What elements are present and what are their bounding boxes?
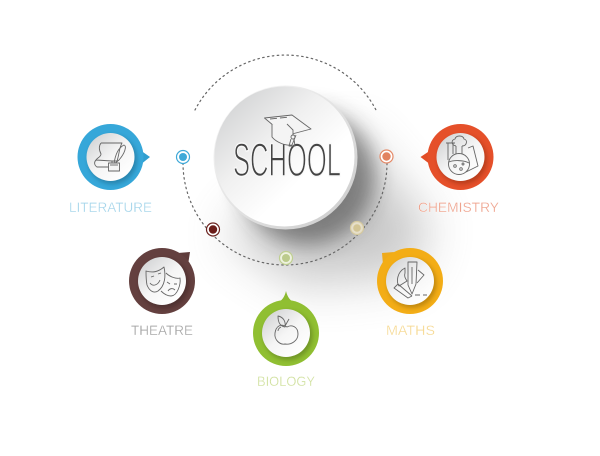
dotted arc: upper xyxy=(195,55,377,112)
panel: chemistry xyxy=(418,124,500,215)
icon: flasks xyxy=(446,136,478,174)
label: maths: MATHS xyxy=(386,322,435,338)
panel: theatre xyxy=(129,248,195,338)
node: theatre xyxy=(206,223,220,236)
icon: theatre masks xyxy=(146,267,180,296)
label: theatre: THEATRE xyxy=(131,322,193,338)
icon: scroll and quill xyxy=(95,143,125,171)
central disc xyxy=(214,86,358,230)
school title: SCHOOL xyxy=(233,133,341,186)
panel: maths xyxy=(377,248,443,338)
icon: ruler and pencil xyxy=(394,262,427,298)
label: chemistry: CHEMISTRY xyxy=(418,199,500,215)
node: literature xyxy=(176,150,190,164)
node: maths xyxy=(350,222,364,234)
icon: apple xyxy=(275,316,298,344)
dotted arc: lower xyxy=(183,163,387,265)
label: biology: BIOLOGY xyxy=(257,373,316,389)
label: literature: LITERATURE xyxy=(69,199,152,215)
panel: literature xyxy=(69,124,152,215)
node: biology xyxy=(280,252,292,264)
panel: biology xyxy=(253,291,319,389)
icon: graduation cap xyxy=(264,115,311,146)
node: chemistry xyxy=(380,150,393,163)
central disc cast shadow xyxy=(225,108,430,285)
